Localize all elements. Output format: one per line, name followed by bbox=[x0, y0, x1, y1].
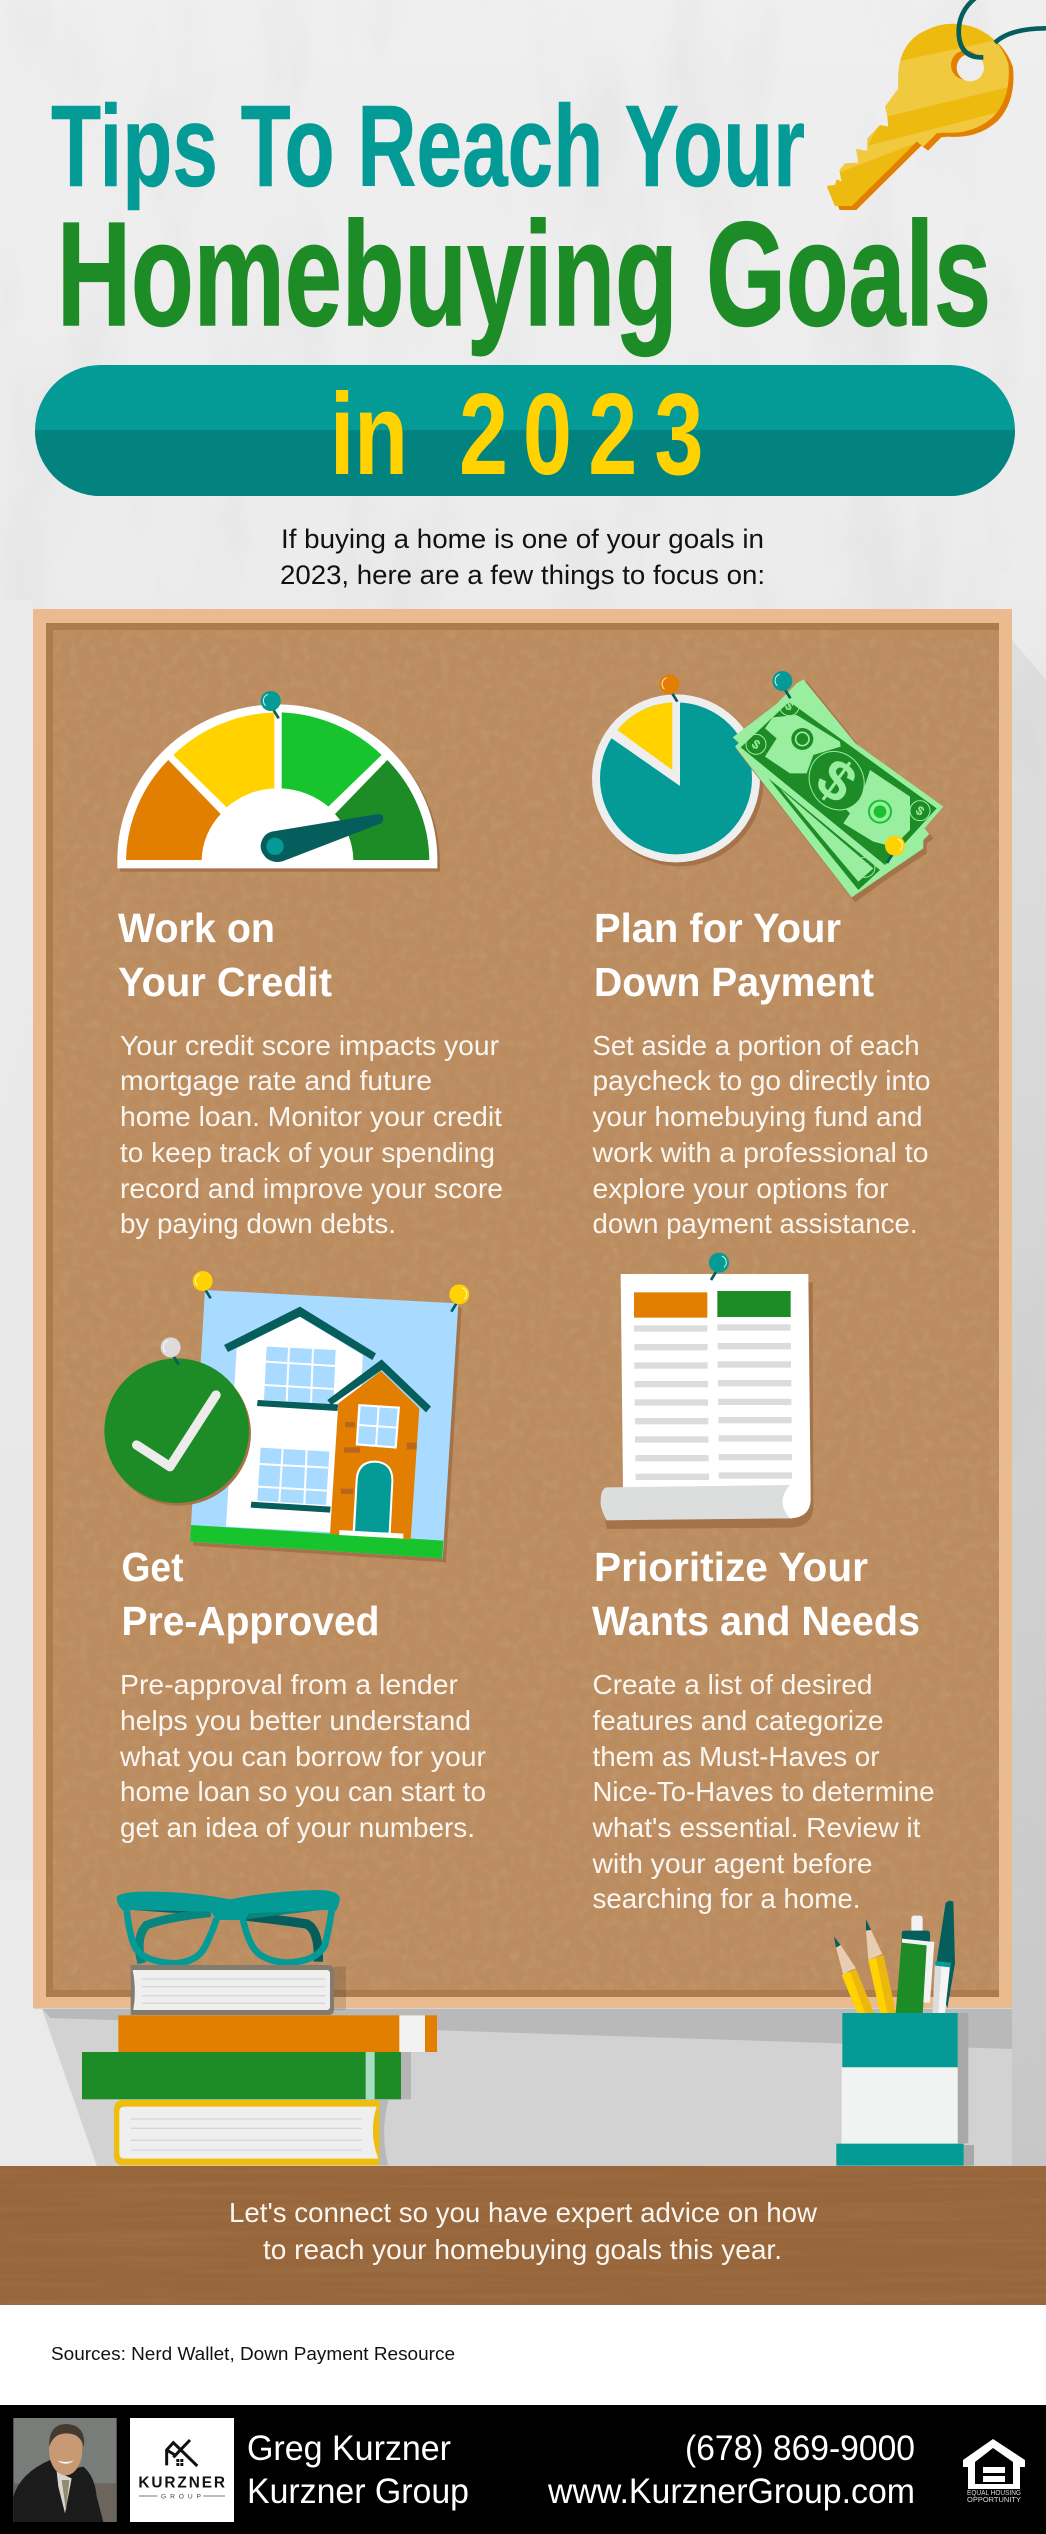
heading: work on your credit: Your Credit bbox=[118, 959, 332, 1005]
text: down payment body: explore your options for bbox=[592, 1173, 888, 1204]
heading: plan for your down payment: Down Payment bbox=[594, 959, 874, 1005]
agent name: Kurzner Group bbox=[247, 2472, 469, 2511]
book: yellow bbox=[114, 2100, 388, 2165]
text: pre-approval body: what you can borrow for your bbox=[119, 1741, 486, 1772]
text: wants and needs body: Create a list of desired bbox=[592, 1669, 872, 1700]
panel: wooden call to action: Let's connect so you have expert advice on how bbox=[229, 2197, 818, 2228]
text: pre-approval body bbox=[119, 1669, 486, 1843]
agent name: Greg Kurzner bbox=[247, 2429, 451, 2468]
text: down payment body bbox=[591, 1030, 930, 1239]
text: pre-approval body: helps you better understand bbox=[120, 1705, 471, 1736]
icon: pie chart bbox=[592, 674, 763, 866]
agent portrait bbox=[13, 2418, 117, 2522]
board drop shadows on wall bbox=[0, 640, 1046, 2166]
icon: dollar bills: $ bbox=[805, 747, 867, 816]
heading: prioritize your wants and needs: Prioritize Your bbox=[594, 1544, 868, 1590]
text: pre-approval body: home loan so you can start to bbox=[120, 1776, 486, 1807]
text: credit body bbox=[120, 1030, 503, 1239]
icon: dollar bills: $ bbox=[913, 803, 927, 819]
company logo: KURZNER bbox=[138, 2475, 225, 2492]
panel: cork board bbox=[33, 609, 1012, 2008]
year pill banner bbox=[0, 365, 1015, 499]
panel: wooden call to action: to reach your homebuying goals this year. bbox=[263, 2234, 782, 2265]
icon: dollar bills: $ bbox=[782, 698, 796, 714]
panel: wooden call to action bbox=[0, 2166, 1046, 2305]
heading: work on your credit: Work on bbox=[118, 905, 275, 951]
panel: plan for your down payment bbox=[591, 671, 943, 1239]
icon: paper list bbox=[601, 1253, 813, 1529]
agent name bbox=[247, 2429, 469, 2511]
illustration: glasses and book stack bbox=[82, 1890, 437, 2165]
text: down payment body: down payment assistance. bbox=[592, 1208, 918, 1239]
heading: work on your credit bbox=[118, 905, 332, 1005]
panel: prioritize your wants and needs bbox=[591, 1253, 934, 1914]
icon: equal housing opportunity: OPPORTUNITY bbox=[967, 2497, 1021, 2504]
contact details: www.KurznerGroup.com bbox=[547, 2472, 915, 2511]
icon: equal housing opportunity: EQUAL HOUSING bbox=[967, 2490, 1021, 2497]
book: white top book bbox=[131, 1965, 346, 2015]
text: wants and needs body bbox=[591, 1669, 934, 1914]
heading: prioritize your wants and needs bbox=[592, 1544, 920, 1644]
intro text: If buying a home is one of your goals in bbox=[281, 524, 764, 554]
icon: house picture bbox=[104, 1271, 469, 1562]
sources strip bbox=[0, 2305, 1046, 2405]
text: wants and needs body: with your agent before bbox=[591, 1848, 872, 1879]
text: pre-approval body: get an idea of your numbers. bbox=[120, 1812, 475, 1843]
text: wants and needs body: searching for a home. bbox=[592, 1883, 860, 1914]
intro text: 2023, here are a few things to focus on: bbox=[280, 560, 765, 590]
icon: pen bbox=[933, 1901, 955, 2013]
text: pre-approval body: Pre-approval from a lender bbox=[120, 1669, 458, 1700]
book: green bbox=[82, 2052, 411, 2099]
company logo bbox=[130, 2418, 234, 2522]
text: down payment body: paycheck to go directly into bbox=[592, 1065, 930, 1096]
icon: dollar bills bbox=[733, 671, 943, 902]
text: credit body: to keep track of your spending bbox=[120, 1137, 495, 1168]
icon: dollar bills: $ bbox=[749, 737, 763, 752]
contact details: (678) 869-9000 bbox=[685, 2429, 915, 2468]
text: credit body: mortgage rate and future bbox=[120, 1065, 432, 1096]
heading: prioritize your wants and needs: Wants and Needs bbox=[592, 1598, 920, 1644]
icon: cup bbox=[836, 2013, 974, 2166]
text: wants and needs body: what's essential. Review it bbox=[591, 1812, 921, 1843]
icon: credit gauge bbox=[117, 691, 440, 872]
icon: pencil right bbox=[866, 1919, 896, 2013]
heading: get pre-approved: Pre-Approved bbox=[122, 1598, 380, 1644]
text: credit body: home loan. Monitor your credit bbox=[120, 1101, 502, 1132]
heading: plan for your down payment bbox=[594, 905, 874, 1005]
text: wants and needs body: features and categorize bbox=[592, 1705, 884, 1736]
text: credit body: record and improve your score bbox=[120, 1173, 503, 1204]
text: down payment body: work with a professional to bbox=[591, 1137, 928, 1168]
icon: glasses bbox=[117, 1890, 340, 1963]
year pill banner: in 2023 bbox=[0, 369, 703, 499]
icon: equal housing opportunity bbox=[963, 2439, 1025, 2504]
company logo: GROUP bbox=[161, 2494, 202, 2501]
text: wants and needs body: them as Must-Haves or bbox=[592, 1741, 880, 1772]
panel: work on your credit bbox=[117, 691, 503, 1239]
heading: get pre-approved bbox=[122, 1544, 380, 1644]
text: down payment body: your homebuying fund and bbox=[592, 1101, 922, 1132]
footer bar bbox=[0, 2405, 1046, 2534]
intro text bbox=[280, 524, 765, 590]
text: wants and needs body: Nice-To-Haves to determine bbox=[592, 1776, 934, 1807]
text: down payment body: Set aside a portion of each bbox=[592, 1030, 920, 1061]
panel: get pre-approved bbox=[104, 1271, 486, 1843]
text: credit body: by paying down debts. bbox=[120, 1208, 396, 1239]
sources strip: Sources: Nerd Wallet, Down Payment Resource bbox=[51, 2343, 455, 2364]
icon: dollar bills: $ bbox=[858, 860, 872, 875]
text: credit body: Your credit score impacts your bbox=[120, 1030, 499, 1061]
book: orange bbox=[118, 2015, 437, 2052]
icon: key on string bbox=[820, 0, 1046, 213]
illustration: pencil cup bbox=[834, 1901, 974, 2166]
contact details bbox=[547, 2429, 915, 2511]
heading: plan for your down payment: Plan for Your bbox=[594, 905, 841, 951]
icon: pencil left bbox=[834, 1937, 874, 2013]
icon: green marker bbox=[896, 1916, 934, 2013]
heading: get pre-approved: Get bbox=[122, 1544, 184, 1590]
